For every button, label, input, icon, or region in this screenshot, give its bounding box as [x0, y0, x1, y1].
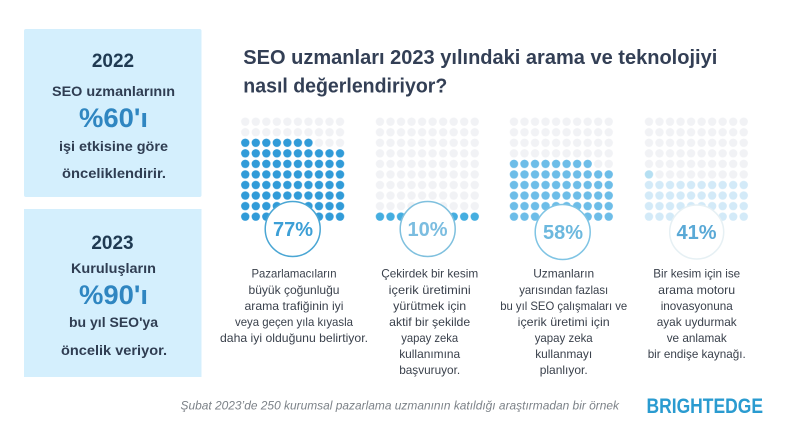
text: column 1	[220, 266, 368, 345]
text: column 2: yapay zeka	[401, 331, 459, 345]
footnote: Şubat 2023’de 250 kurumsal pazarlama uzmanının katıldığı araştırmadan bir örnek	[180, 398, 620, 412]
text: column 3: Uzmanların	[533, 266, 594, 280]
badge: 77%: 77%	[273, 219, 313, 241]
badge: 10%	[400, 202, 455, 256]
text: işi etkisine göre: işi etkisine göre	[59, 138, 168, 154]
year 2023: 2023	[91, 233, 134, 254]
badge: 58%: 58%	[543, 222, 583, 244]
text: column 1: veya geçen yıla kıyasla	[235, 315, 353, 329]
chart: 41 percent dot grid	[644, 116, 749, 259]
text: column 2: başvuruyor.	[399, 363, 460, 377]
text: column 2: aktif bir şekilde	[389, 315, 471, 329]
panel: 2023	[24, 209, 202, 377]
text: column 4: arama motoru	[658, 283, 735, 297]
text: column 3: kullanmayı	[535, 347, 592, 361]
text: column 3: içerik üretimi için	[518, 315, 610, 329]
text: column 4: Bir kesim için ise	[653, 266, 741, 280]
logo: BrightEdge: BRIGHTEDGE	[646, 395, 763, 418]
text: column 4: inovasyonuna	[661, 299, 733, 313]
text: column 2: Çekirdek bir kesim	[381, 266, 478, 280]
text: column 1: daha iyi olduğunu belirtiyor.	[220, 331, 368, 345]
chart: 77 percent dot grid	[240, 116, 345, 257]
title	[243, 47, 717, 98]
text: bu yıl SEO'ya: bu yıl SEO'ya	[69, 314, 158, 330]
chart: 58 percent dot grid	[509, 116, 614, 260]
badge: 77%	[265, 202, 320, 256]
text: column 3	[500, 266, 628, 377]
text: column 3: yapay zeka	[535, 331, 593, 345]
title: SEO uzmanları 2023 yılındaki arama ve teknolojiyi	[243, 47, 717, 69]
text: column 4: ayak uydurmak	[657, 315, 738, 329]
text: column 4: bir endişe kaynağı.	[648, 347, 746, 361]
text: önceliklendirir: önceliklendirir.	[62, 165, 166, 181]
badge: 41%: 41%	[676, 222, 717, 244]
stat: 60 percent: %60'ı	[79, 103, 148, 133]
text: column 4: ve anlamak	[667, 331, 728, 345]
text: SEO uzmanlarının: SEO uzmanlarının	[52, 83, 175, 99]
chart: 10 percent dot grid	[375, 116, 480, 257]
badge: 58%	[535, 204, 590, 260]
stat: 90 percent: %90'ı	[79, 280, 148, 310]
text: Kuruluşların: Kuruluşların	[71, 260, 156, 276]
text: column 2: kullanımına	[399, 347, 461, 361]
text: column 3: bu yıl SEO çalışmaları ve	[500, 299, 628, 313]
year 2022: 2022	[92, 51, 134, 72]
text: column 3: planlıyor.	[540, 363, 588, 377]
text: column 4	[648, 266, 746, 361]
badge: 41%	[670, 205, 724, 259]
text: column 2	[381, 266, 478, 377]
panel: 2022	[24, 29, 202, 197]
text: column 1: arama trafiğinin iyi	[244, 299, 344, 313]
badge: 10%: 10%	[407, 219, 448, 241]
text: column 1: Pazarlamacıların	[252, 266, 336, 280]
text: column 2: içerik üretimini	[389, 283, 471, 297]
text: column 3: yarısından fazlası	[519, 283, 608, 297]
text: column 2: yürütmek için	[393, 299, 466, 313]
title: nasıl değerlendiriyor?	[243, 76, 447, 98]
text: öncelik veriyor: öncelik veriyor.	[61, 342, 167, 358]
text: column 1: büyük çoğunluğu	[248, 283, 340, 297]
